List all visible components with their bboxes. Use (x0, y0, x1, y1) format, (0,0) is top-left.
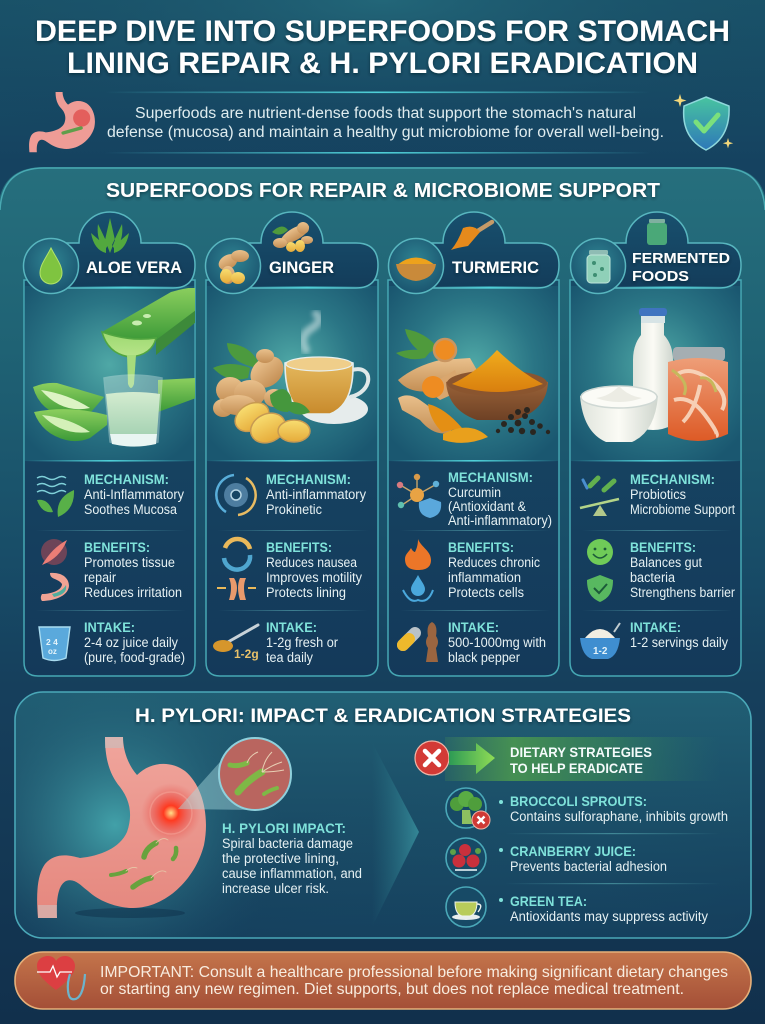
benefits: turmeric: Reduces chronic (448, 555, 540, 570)
strategy: broccoli sprouts (446, 788, 728, 829)
illustration: turmeric powder bowl, scoop and pepper (396, 329, 550, 443)
icon: heart with stethoscope (37, 956, 85, 999)
intake: turmeric: 500-1000mg with (448, 635, 546, 650)
card: turmeric (388, 212, 559, 676)
mechanism: fermented foods: Microbiome Support (630, 502, 735, 517)
benefits: ginger: Protects lining (266, 585, 346, 600)
banner: dietary strategies (415, 737, 720, 781)
benefits: fermented foods: Balances gut (630, 555, 702, 570)
card header: aloe vera: ALOE VERA (86, 259, 182, 277)
benefits: fermented foods: bacteria (630, 570, 675, 585)
mechanism: fermented foods: MECHANISM: (630, 471, 715, 487)
strategy: broccoli sprouts: BROCCOLI SPROUTS: (510, 793, 647, 809)
card header: aloe vera (24, 212, 195, 294)
mechanism: turmeric: (Antioxidant & (448, 499, 526, 514)
card header: turmeric: TURMERIC (452, 259, 539, 277)
callout: important disclaimer (15, 952, 751, 1009)
callout: important disclaimer: or starting any new regimen. Diet supports, but does not replace medical treatment. (100, 981, 684, 998)
benefits: fermented foods (587, 539, 735, 602)
benefits: turmeric: inflammation (448, 570, 521, 585)
intake: turmeric: INTAKE: (448, 619, 499, 635)
strategy: cranberry juice: Prevents bacterial adhesion (510, 859, 667, 874)
mechanism: aloe vera: Anti-Inflammatory (84, 487, 184, 502)
text: H. pylori impact: increase ulcer risk. (222, 881, 329, 896)
strategy: green tea: GREEN TEA: (510, 893, 587, 909)
bacteria in stomach (111, 839, 176, 887)
benefits: ginger: Improves motility (266, 570, 362, 585)
intake: turmeric (403, 619, 546, 665)
callout: magnified bacteria (178, 738, 291, 810)
mechanism: aloe vera: MECHANISM: (84, 471, 169, 487)
card: aloe vera (24, 212, 196, 676)
benefits: aloe vera: repair (84, 570, 116, 585)
mechanism: turmeric (397, 469, 552, 528)
intake: ginger: 1-2g fresh or (266, 635, 338, 650)
card: fermented foods (570, 212, 741, 676)
text: H. pylori impact: cause inflammation, and (222, 866, 362, 881)
panel: superfoods (0, 167, 765, 686)
text: H. pylori impact: H. PYLORI IMPACT: (222, 820, 346, 836)
mechanism: aloe vera: Soothes Mucosa (84, 502, 177, 517)
intro text: defense (mucosa) and maintain a healthy gut microbiome for overall well-being. (107, 124, 664, 141)
intro text (107, 105, 664, 141)
text: H. pylori impact (222, 820, 362, 896)
illustration: milk, yogurt and kimchi (580, 308, 728, 442)
intake: ginger: 1-2g (234, 647, 259, 661)
mechanism: turmeric: Anti-inflammatory) (448, 513, 552, 528)
intake: aloe vera: (pure, food-grade) (84, 650, 185, 665)
intro text: Superfoods are nutrient-dense foods that support the stomach's natural (135, 105, 636, 122)
intake: ginger: INTAKE: (266, 619, 317, 635)
benefits: ginger: BENEFITS: (266, 539, 332, 555)
intake: turmeric: black pepper (448, 650, 520, 665)
mechanism: ginger: MECHANISM: (266, 471, 351, 487)
card header: ginger: GINGER (269, 259, 334, 277)
strategy: cranberry juice: CRANBERRY JUICE: (510, 843, 636, 859)
intake: aloe vera: oz (48, 647, 57, 656)
benefits: turmeric (403, 539, 540, 601)
illustration: ginger root and tea (213, 314, 368, 448)
card header: fermented foods: FOODS (632, 268, 689, 285)
mechanism: turmeric: Curcumin (448, 485, 501, 500)
mechanism: fermented foods: Probiotics (630, 487, 686, 502)
strategy: green tea: Antioxidants may suppress activity (510, 909, 708, 924)
benefits: turmeric: Protects cells (448, 585, 524, 600)
benefits: aloe vera: BENEFITS: (84, 539, 150, 555)
callout: important disclaimer: IMPORTANT: Consult a healthcare professional before making significant dietary changes (100, 964, 728, 981)
title: DEEP DIVE INTO SUPERFOODS FOR STOMACH (35, 15, 730, 48)
icon: stomach with irritation (29, 92, 95, 152)
illustration: stomach with bacteria (37, 737, 206, 918)
intake: aloe vera (39, 619, 185, 665)
card: ginger (206, 212, 378, 676)
title (35, 15, 730, 80)
illustration: aloe leaves and glass of juice (33, 287, 196, 446)
intake: fermented foods: 1-2 servings daily (630, 635, 728, 650)
mechanism: aloe vera (37, 471, 184, 517)
text: H. pylori impact: Spiral bacteria damage (222, 836, 353, 851)
mechanism: turmeric: MECHANISM: (448, 469, 533, 485)
benefits: aloe vera (41, 539, 182, 601)
icon: shield with check (674, 94, 733, 150)
intake: fermented foods: 1-2 (593, 646, 608, 657)
strategy: cranberry juice (446, 838, 667, 878)
benefits: turmeric: BENEFITS: (448, 539, 514, 555)
mechanism: fermented foods (580, 471, 735, 517)
strategy: green tea (446, 887, 708, 927)
title: LINING REPAIR & H. PYLORI ERADICATION (67, 47, 698, 80)
heading: superfoods: SUPERFOODS FOR REPAIR & MICROBIOME SUPPORT (106, 179, 660, 202)
intake: fermented foods: INTAKE: (630, 619, 681, 635)
heading: H. pylori: H. PYLORI: IMPACT & ERADICATION STRATEGIES (135, 705, 631, 727)
card header: turmeric (388, 212, 559, 294)
card header: fermented foods (570, 212, 741, 294)
intake: ginger (213, 619, 338, 665)
intake: aloe vera: INTAKE: (84, 619, 135, 635)
arrow: chevron divider (372, 742, 419, 927)
card header: ginger (206, 212, 378, 294)
panel: H. pylori (15, 692, 751, 938)
mechanism: ginger: Prokinetic (266, 502, 322, 517)
benefits: fermented foods: Strengthens barrier (630, 585, 735, 600)
benefits: fermented foods: BENEFITS: (630, 539, 696, 555)
intake: ginger: tea daily (266, 650, 313, 665)
benefits: ginger: Reduces nausea (266, 555, 357, 570)
strategy: broccoli sprouts: Contains sulforaphane, inhibits growth (510, 809, 728, 824)
text: H. pylori impact: the protective lining, (222, 851, 339, 866)
benefits: ginger (217, 539, 362, 600)
card header: fermented foods: FERMENTED (632, 250, 730, 267)
mechanism: ginger (216, 471, 366, 517)
banner: dietary strategies: TO HELP ERADICATE (510, 760, 643, 776)
intake: aloe vera: 2 4 (46, 637, 58, 647)
benefits: aloe vera: Reduces irritation (84, 585, 182, 600)
intake: aloe vera: 2-4 oz juice daily (84, 635, 178, 650)
banner: dietary strategies: DIETARY STRATEGIES (510, 744, 652, 760)
benefits: aloe vera: Promotes tissue (84, 555, 175, 570)
intake: fermented foods (580, 619, 728, 659)
mechanism: ginger: Anti-inflammatory (266, 487, 366, 502)
